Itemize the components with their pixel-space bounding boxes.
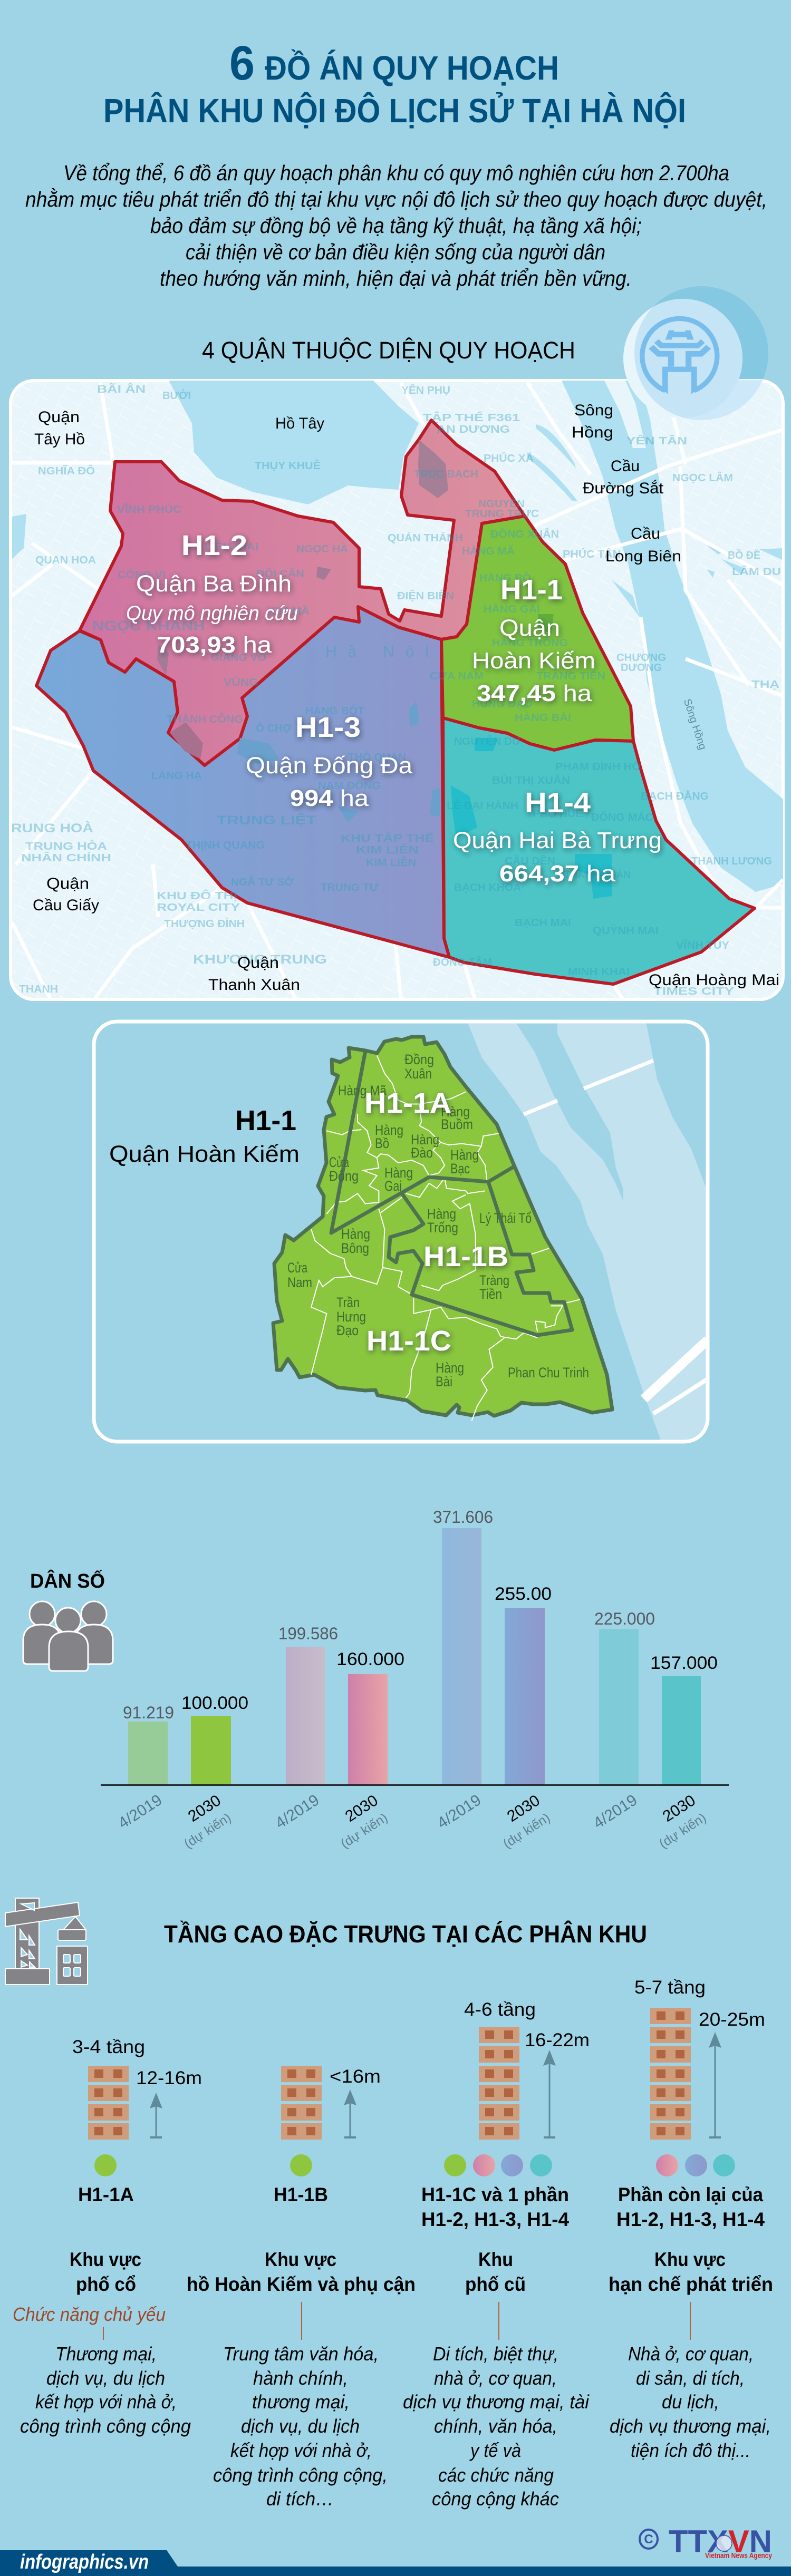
neighbouring place labels: Cầu Giấy bbox=[33, 897, 99, 914]
street labels: KHƯƠNG TRUNG bbox=[193, 952, 327, 967]
street labels: THỔ QUAN bbox=[348, 751, 406, 763]
street labels: THANH LƯƠNG bbox=[691, 856, 772, 867]
street labels: VĨNH TUY bbox=[676, 939, 730, 951]
bar values: 160.000 bbox=[336, 1649, 404, 1669]
bar values: 157.000 bbox=[650, 1653, 718, 1673]
functions column 3: Di tích, biệt thự, bbox=[433, 2343, 558, 2365]
axis labels: 4/2019 bbox=[115, 1791, 165, 1832]
axis labels: 4/2019 bbox=[590, 1791, 640, 1832]
street labels: THỤY KHUÊ bbox=[255, 459, 321, 472]
map water: West Lake and Red River bbox=[12, 381, 783, 892]
functions column 1: Thương mại, bbox=[55, 2343, 157, 2365]
title: 6 bbox=[229, 36, 255, 90]
street labels: CHƯƠNG bbox=[616, 652, 666, 664]
street labels: KIM MÃ bbox=[267, 605, 310, 617]
street labels: NGÃ TƯ SỞ bbox=[231, 876, 294, 888]
ward boundaries bbox=[311, 1055, 580, 1421]
street labels: RUNG HOÀ bbox=[11, 821, 93, 835]
axis labels: (dự kiến) bbox=[181, 1810, 234, 1851]
zone names bbox=[78, 2184, 765, 2230]
zone names: Phần còn lại của bbox=[618, 2184, 763, 2205]
neighbouring place labels: Sông bbox=[574, 402, 613, 419]
zone label H1-1: 347,45 ha bbox=[477, 681, 592, 706]
bar values: 199.586 bbox=[278, 1624, 338, 1643]
ward names: Đồng bbox=[404, 1052, 434, 1067]
functions column 3: công cộng khác bbox=[432, 2488, 559, 2510]
building height diagram 4: 5-7 tầng bbox=[634, 1977, 706, 1998]
street labels: THANH NHÀN bbox=[564, 869, 631, 881]
street labels: LÁNG HẠ bbox=[151, 770, 202, 782]
street labels: MINH KHAI bbox=[568, 966, 630, 978]
map section heading: 4 QUẬN THUỘC DIỆN QUY HOẠCH bbox=[202, 337, 575, 364]
area names: phố cũ bbox=[465, 2273, 526, 2295]
logo: TTXVN: TTXVN bbox=[669, 2524, 772, 2559]
functions column 1: công trình công cộng bbox=[20, 2415, 191, 2437]
street labels: ĐỒNG XUÂN bbox=[490, 528, 559, 540]
zone label H1-3: Quận Đống Đa bbox=[246, 753, 413, 779]
axis labels: 2030 bbox=[504, 1792, 543, 1825]
axis labels: (dự kiến) bbox=[500, 1810, 553, 1851]
zone label H1-4 bbox=[453, 787, 662, 887]
street labels: TRÚC BẠCH bbox=[414, 468, 478, 480]
street labels: VĨNH PHÚC bbox=[117, 503, 181, 516]
street labels: BẠCH ĐẰNG bbox=[641, 790, 709, 802]
street labels: PHẠM ĐÌNH HỔ bbox=[555, 760, 641, 773]
street labels: HÀNG BỘT bbox=[305, 704, 364, 717]
street labels: THỊNH QUANG bbox=[186, 840, 265, 851]
axis labels bbox=[115, 1791, 709, 1851]
zone names: H1-1B bbox=[274, 2184, 328, 2205]
Hoan Kiem shape bbox=[273, 1037, 612, 1416]
bar values bbox=[123, 1508, 718, 1722]
zone label H1-1: Quận bbox=[499, 615, 560, 641]
street labels: AN DƯƠNG bbox=[437, 424, 510, 435]
street labels: KIM LIÊN bbox=[356, 843, 419, 856]
street labels: TẬP THỂ F361 bbox=[423, 411, 520, 424]
logo: TTXVN: Vietnam News Agency bbox=[705, 2551, 773, 2560]
title: PHÂN KHU NỘI ĐÔ LỊCH SỬ TẠI HÀ NỘI bbox=[103, 91, 686, 130]
street labels: LÂM DU bbox=[732, 565, 781, 578]
street labels: LIỄU GIAI bbox=[205, 541, 258, 553]
street labels bbox=[11, 383, 781, 997]
area names: phố cổ bbox=[76, 2273, 136, 2295]
functions column 1 bbox=[20, 2343, 191, 2437]
area names: Khu vực bbox=[70, 2249, 141, 2270]
panel heading: Quận Hoàn Kiếm bbox=[109, 1141, 300, 1167]
neighbouring place labels: Quận Hoàng Mai bbox=[649, 971, 779, 989]
street labels: Hà Nội bbox=[325, 643, 429, 660]
building height diagram 1: 12-16m bbox=[136, 2068, 202, 2088]
zone label H1-1: Hoàn Kiếm bbox=[472, 648, 595, 674]
area names: Khu vực bbox=[265, 2249, 336, 2270]
river banks bbox=[467, 1022, 708, 1442]
functions column 2: hành chính, bbox=[253, 2367, 348, 2389]
bar values: 91.219 bbox=[123, 1703, 174, 1722]
street labels: KIM LIÊN bbox=[366, 856, 416, 869]
axis labels: (dự kiến) bbox=[657, 1810, 709, 1851]
zone colour dots bbox=[94, 2154, 735, 2176]
street labels: HÀNG GAI bbox=[484, 603, 540, 615]
street labels: LÊ ĐẠI HÀNH bbox=[447, 799, 518, 812]
ward names: Hưng bbox=[336, 1309, 366, 1325]
street labels: TIMES CITY bbox=[653, 986, 735, 997]
street labels: BÃI ÂN bbox=[97, 383, 146, 395]
street labels: Sông Hồng bbox=[681, 697, 709, 751]
street labels: YÊN TÂN bbox=[626, 434, 687, 447]
axis labels: 4/2019 bbox=[434, 1791, 484, 1832]
street labels: TRUNG TỰ bbox=[321, 882, 379, 893]
functions column 4: di sản, di tích, bbox=[636, 2367, 745, 2389]
ward names bbox=[287, 1052, 589, 1389]
functions column 1: dịch vụ, du lịch bbox=[46, 2367, 165, 2389]
functions column 3 bbox=[403, 2343, 590, 2510]
street labels: TRÀNG TIỀN bbox=[536, 670, 605, 682]
ward names: Hàng bbox=[427, 1206, 456, 1222]
street labels: ĐỘI CẤN bbox=[256, 567, 304, 580]
functions column 2: kết hợp với nhà ở, bbox=[230, 2439, 372, 2461]
functions column 2: dịch vụ, du lịch bbox=[241, 2415, 360, 2437]
ward names: Buồm bbox=[441, 1116, 473, 1132]
zone label H1-2: 703,93 ha bbox=[157, 632, 272, 658]
zone label H1-4: 664,37 ha bbox=[499, 861, 616, 887]
logo backdrop circle bbox=[634, 286, 768, 420]
neighbouring place labels: Đường Sắt bbox=[583, 480, 664, 497]
zone label H1-3 bbox=[246, 712, 413, 811]
street labels: NAM ĐỒNG bbox=[318, 779, 381, 792]
sub-zone labels: H1-1A bbox=[364, 1087, 451, 1119]
neighbouring place labels: Long Biên bbox=[605, 548, 681, 565]
zone names: H1-1A bbox=[78, 2184, 134, 2205]
ward names: Cửa bbox=[287, 1260, 308, 1276]
neighbouring place labels: Cầu bbox=[631, 525, 660, 542]
street labels: THÀNH CÔNG bbox=[167, 713, 243, 725]
ward names: Trần bbox=[336, 1295, 360, 1310]
street labels: ĐỐNG MÁC bbox=[591, 811, 653, 823]
building height diagram 3: 4-6 tầng bbox=[464, 1999, 536, 2020]
icon: Hanoi emblem bbox=[623, 299, 763, 420]
lakes inside zones bbox=[157, 440, 612, 899]
ward names: Phan Chu Trinh bbox=[508, 1365, 589, 1381]
main function caption: Chức năng chủ yếu bbox=[13, 2303, 166, 2325]
ward names: Tràng bbox=[479, 1272, 509, 1288]
neighbouring place labels: Hồng bbox=[572, 424, 613, 441]
area names: hồ Hoàn Kiếm và phụ cận bbox=[187, 2273, 416, 2295]
ward names: Cửa bbox=[329, 1154, 350, 1170]
functions column 1: kết hợp với nhà ở, bbox=[35, 2391, 177, 2413]
ward names: Hàng Mã bbox=[338, 1083, 387, 1099]
building height diagram 4 bbox=[634, 1977, 765, 2140]
footer band bbox=[0, 2550, 791, 2576]
zone label H1-2: H1-2 bbox=[181, 530, 247, 561]
building height diagram 2: <16m bbox=[330, 2066, 381, 2087]
ward names: Tiền bbox=[479, 1286, 502, 1302]
functions column 2: di tích… bbox=[266, 2488, 334, 2510]
axis labels: 2030 bbox=[342, 1792, 381, 1825]
ward names: Đạo bbox=[336, 1323, 359, 1338]
zone H1-2 bbox=[80, 420, 525, 765]
street labels: KHU TẬP THỂ bbox=[341, 832, 434, 844]
functions column 3: nhà ở, cơ quan, bbox=[434, 2367, 557, 2389]
bar values: 225.000 bbox=[594, 1609, 655, 1628]
functions column 4: Nhà ở, cơ quan, bbox=[628, 2343, 754, 2365]
building height diagram 3: 16-22m bbox=[525, 2030, 590, 2050]
street labels: VÙNG bbox=[224, 676, 258, 688]
neighbouring place labels: Hồ Tây bbox=[275, 415, 324, 432]
zone names: H1-2, H1-3, H1-4 bbox=[616, 2209, 765, 2230]
functions column 4: du lịch, bbox=[662, 2391, 719, 2413]
zone H1-1 bbox=[441, 516, 633, 750]
functions column 2: công trình công cộng, bbox=[213, 2464, 388, 2486]
street labels: CỐNG VỊ bbox=[118, 568, 166, 581]
ward names: Lý Thái Tổ bbox=[479, 1210, 532, 1226]
street labels: PHỐ HUẾ bbox=[533, 807, 583, 820]
street labels: NGỌC KHÁNH bbox=[92, 618, 205, 634]
neighbouring place labels bbox=[33, 402, 779, 994]
functions column 4: tiện ích đô thị... bbox=[631, 2439, 750, 2461]
functions column 4 bbox=[610, 2343, 771, 2461]
ward names: Đông bbox=[329, 1168, 359, 1184]
axis labels: 4/2019 bbox=[272, 1791, 322, 1832]
ward names: Nam bbox=[287, 1275, 312, 1290]
map roads bbox=[12, 383, 783, 998]
zone H1-4 bbox=[443, 718, 755, 984]
axis labels: 2030 bbox=[185, 1792, 224, 1825]
sub-zone labels: H1-1B bbox=[423, 1241, 508, 1272]
neighbouring place labels: Quận bbox=[38, 409, 80, 426]
building height diagram 1: 3-4 tầng bbox=[72, 2037, 145, 2057]
street labels: NGỌC HÀ bbox=[296, 543, 348, 555]
street labels: Ô CHỢ bbox=[256, 722, 292, 734]
functions column 3: dịch vụ thương mại, tài bbox=[403, 2391, 590, 2413]
panel heading bbox=[109, 1105, 300, 1167]
street labels: HÀNG MÃ bbox=[462, 545, 515, 557]
bar values: 255.00 bbox=[495, 1584, 552, 1604]
street labels: HÀNG BÀI bbox=[515, 712, 571, 724]
title bbox=[103, 36, 686, 130]
street labels: HÀNG BỒ bbox=[479, 571, 531, 584]
ward names: Xuân bbox=[404, 1066, 432, 1082]
intro text: cải thiện về cơ bản điều kiện sống của người dân bbox=[186, 240, 605, 264]
street labels: PHÚC TÂN bbox=[563, 548, 621, 560]
functions column 2 bbox=[213, 2343, 388, 2510]
zone label H1-1: H1-1 bbox=[500, 574, 563, 606]
zone names: H1-2, H1-3, H1-4 bbox=[421, 2209, 569, 2230]
area names: Khu vực bbox=[654, 2249, 726, 2270]
intro text bbox=[25, 161, 767, 290]
street labels: BẠCH MAI bbox=[515, 917, 571, 929]
building height diagram 3 bbox=[464, 1999, 590, 2140]
axis labels: (dự kiến) bbox=[338, 1810, 390, 1851]
street labels: NGUYỄN DU bbox=[454, 735, 520, 747]
street labels: THANH bbox=[19, 984, 58, 995]
street labels: BỒ ĐỀ bbox=[728, 549, 760, 561]
ward names: Hàng bbox=[384, 1165, 413, 1181]
panel heading: H1-1 bbox=[235, 1105, 296, 1136]
neighbouring place labels: Tây Hồ bbox=[34, 431, 85, 448]
ward names: Hàng bbox=[375, 1122, 403, 1138]
neighbouring place labels: Quận bbox=[237, 954, 279, 971]
ward names: Hàng bbox=[436, 1360, 464, 1376]
zone label H1-4: Quận Hai Bà Trưng bbox=[453, 828, 662, 853]
functions column 2: Trung tâm văn hóa, bbox=[223, 2343, 379, 2365]
area names bbox=[70, 2249, 773, 2295]
area names: hạn chế phát triển bbox=[609, 2273, 773, 2295]
population heading: DÂN SỐ bbox=[30, 1569, 105, 1592]
street labels: TRUNG LIỆT bbox=[217, 813, 316, 828]
functions column 3: y tế và bbox=[469, 2439, 521, 2461]
street labels: CỬA NAM bbox=[430, 669, 484, 682]
street labels: NGỌC LÂM bbox=[672, 471, 733, 484]
neighbouring place labels: Cầu bbox=[611, 458, 640, 475]
ward names: Bài bbox=[436, 1374, 452, 1389]
zone label H1-2 bbox=[126, 530, 298, 658]
zone H1-3 bbox=[36, 607, 449, 957]
street labels: BƯỞI bbox=[162, 389, 191, 402]
bar chart: population bbox=[101, 1508, 729, 1851]
ward names: Trống bbox=[427, 1220, 458, 1236]
street labels: QUÁN THÁNH bbox=[388, 532, 463, 544]
ward names: Đào bbox=[411, 1145, 433, 1161]
bar values: 371.606 bbox=[433, 1508, 493, 1527]
zone label H1-2: Quận Ba Đình bbox=[136, 571, 292, 597]
street labels: NGHĨA ĐÔ bbox=[38, 464, 95, 477]
zone label H1-1 bbox=[472, 574, 595, 706]
street labels: THƯỢNG ĐÌNH bbox=[164, 918, 245, 930]
zone label H1-4: H1-4 bbox=[525, 787, 591, 819]
title: ĐỒ ÁN QUY HOẠCH bbox=[265, 49, 559, 87]
zone label H1-3: H1-3 bbox=[295, 712, 361, 743]
street labels: ROYAL CITY bbox=[157, 902, 240, 913]
street labels: GIẢNG VÕ bbox=[211, 651, 266, 664]
sub-zone labels bbox=[364, 1087, 508, 1357]
functions column 3: chính, văn hóa, bbox=[434, 2415, 557, 2437]
intro text: theo hướng văn minh, hiện đại và phát triển bền vững. bbox=[160, 266, 632, 290]
street labels: TRUNG TRỰC bbox=[465, 508, 539, 520]
building height diagram 4: 20-25m bbox=[699, 2009, 765, 2030]
ward names: Hàng bbox=[441, 1104, 470, 1120]
street labels: ĐIỆN BIÊN bbox=[397, 589, 454, 602]
street labels: THẠ bbox=[751, 679, 779, 691]
sub-zone boundaries bbox=[331, 1051, 572, 1335]
street labels: CẦU DỀN bbox=[505, 855, 555, 867]
functions column 3: các chức năng bbox=[438, 2464, 554, 2486]
icon: people bbox=[23, 1601, 113, 1671]
street labels: NHÂN CHÍNH bbox=[21, 851, 111, 864]
ward names: Gai bbox=[384, 1178, 402, 1194]
building height diagram 2 bbox=[281, 2066, 381, 2140]
area names: Khu bbox=[478, 2249, 513, 2270]
zone label H1-3: 994 ha bbox=[290, 785, 369, 811]
street labels: QUAN HOA bbox=[35, 555, 96, 566]
intro text: bảo đảm sự đồng bộ về hạ tầng kỹ thuật, hạ tầng xã hội; bbox=[150, 213, 642, 238]
street labels: ĐỒNG TÂM bbox=[433, 956, 492, 968]
sub-zone labels: H1-1C bbox=[366, 1325, 451, 1357]
ward names: Hàng bbox=[450, 1147, 479, 1163]
ward names: Hàng bbox=[341, 1226, 370, 1242]
footer band: infographics.vn bbox=[20, 2551, 149, 2573]
street labels: BẠCH KHOA bbox=[454, 882, 521, 893]
street labels: YÊN PHỤ bbox=[401, 384, 450, 396]
ward names: Bồ bbox=[375, 1135, 389, 1151]
panel: Hoan Kiem detail map bbox=[94, 1022, 708, 1442]
logo: TTXVN: C bbox=[644, 2532, 653, 2546]
street labels: NGUYỄN bbox=[478, 498, 525, 510]
street labels: HÀNG TRỐNG bbox=[492, 636, 568, 649]
axis labels: 2030 bbox=[660, 1792, 699, 1825]
street labels: DƯƠNG bbox=[621, 662, 662, 674]
zone names: H1-1C và 1 phần bbox=[421, 2184, 569, 2205]
bar values: 100.000 bbox=[181, 1693, 248, 1713]
street labels: QUỲNH MAI bbox=[593, 924, 659, 937]
functions column 2: thương mại, bbox=[252, 2391, 350, 2413]
panel: district map bbox=[11, 381, 783, 999]
ward names: Hàng bbox=[411, 1132, 439, 1148]
intro text: Về tổng thể, 6 đồ án quy hoạch phân khu có quy mô nghiên cứu hơn 2.700ha bbox=[63, 161, 729, 185]
functions column 4: dịch vụ thương mại, bbox=[610, 2415, 771, 2437]
zone label H1-2: Quy mô nghiên cứu bbox=[126, 602, 298, 625]
street labels: HÙNG ĐẠO bbox=[472, 697, 533, 710]
street labels: BÙI THỊ XUÂN bbox=[492, 774, 570, 786]
street labels: TRUNG HÒA bbox=[25, 840, 107, 852]
ward names: Bông bbox=[341, 1240, 369, 1256]
building height diagram 1 bbox=[72, 2037, 202, 2140]
neighbouring place labels: Thanh Xuân bbox=[208, 976, 300, 994]
street labels: KHU ĐÔ THỊ bbox=[157, 889, 237, 902]
ward names: Bạc bbox=[450, 1161, 470, 1177]
neighbouring place labels: Quận bbox=[46, 875, 89, 892]
icon: crane and building bbox=[5, 1898, 88, 1985]
heading: building heights: TẦNG CAO ĐẶC TRƯNG TẠI CÁC PHÂN KHU bbox=[164, 1920, 647, 1948]
street labels: PHÚC XÁ bbox=[484, 452, 534, 464]
